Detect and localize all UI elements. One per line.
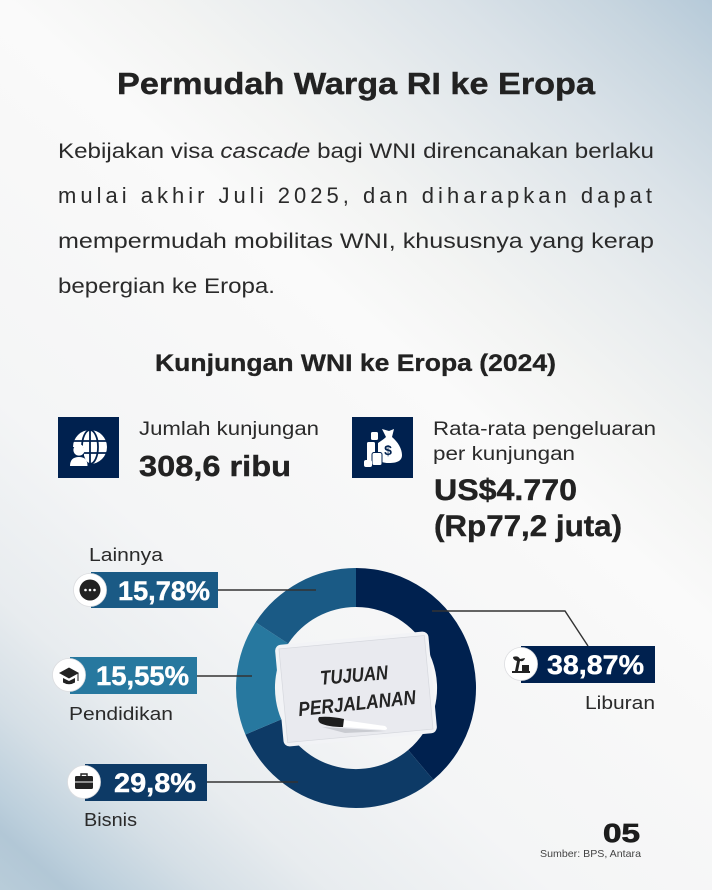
number: total visits: 308,6 ribu — [139, 451, 291, 483]
number: average spending — [434, 474, 622, 543]
callout: Liburan — [504, 646, 655, 713]
text block: intro paragraph: mulai akhir Juli 2025, dan diharapkan dapat — [58, 183, 652, 208]
text block: intro paragraph: mempermudah mobilitas WNI, khususnya yang kerap — [58, 230, 654, 253]
text block: intro paragraph: Kebijakan visa cascade bagi WNI direncanakan berlaku — [58, 140, 654, 163]
value: 38,87%: 38,87% — [547, 650, 644, 680]
callout: Pendidikan — [52, 657, 197, 724]
title: Permudah Warga RI ke Eropa — [117, 66, 596, 101]
icon: briefcase — [68, 766, 100, 798]
heading: visits: Kunjungan WNI ke Eropa (2024) — [155, 350, 556, 377]
label: Lainnya: Lainnya — [89, 545, 164, 565]
label: Bisnis: Bisnis — [84, 810, 137, 830]
segment: Liburan 38,87% — [356, 568, 476, 780]
callout: Bisnis — [68, 764, 207, 830]
icon: marker — [318, 717, 387, 733]
text: Tujuan Perjalanan — [297, 662, 417, 721]
icon: globe and person — [58, 417, 119, 478]
segment: Pendidikan 15,55% — [236, 622, 288, 734]
number: average spending: (Rp77,2 juta) — [434, 510, 622, 543]
text block: intro paragraph — [58, 140, 654, 298]
panel: average spending — [352, 417, 656, 543]
icon: dots — [74, 574, 106, 606]
value: 15,55%: 15,55% — [96, 661, 189, 691]
label: Pendidikan: Pendidikan — [69, 704, 173, 724]
value: 15,78%: 15,78% — [118, 576, 210, 606]
segment: Bisnis 29,8% — [245, 719, 433, 808]
label: total visits: Jumlah kunjungan — [139, 419, 319, 440]
label: average spending: Rata-rata pengeluaran — [433, 419, 656, 440]
icon: money bag and coins — [352, 417, 413, 478]
icon: graduation cap — [52, 658, 86, 692]
text: Tujuan Perjalanan: TUJUAN — [319, 662, 389, 690]
source: Sumber: BPS, Antara — [540, 848, 641, 860]
icon: palm tree and luggage — [504, 648, 538, 680]
donut chart: travel purpose — [236, 568, 476, 808]
whiteboard: center label — [275, 631, 437, 747]
number: average spending: US$4.770 — [434, 474, 577, 507]
value: 29,8%: 29,8% — [114, 768, 196, 798]
label: Liburan: Liburan — [585, 693, 655, 713]
panel: total visits — [58, 417, 319, 483]
callout: Lainnya — [74, 545, 218, 608]
label: average spending: per kunjungan — [433, 444, 575, 465]
text block: intro paragraph: bepergian ke Eropa. — [58, 275, 275, 298]
page number: 05 — [603, 818, 640, 848]
label: average spending — [433, 419, 656, 465]
leader lines — [197, 590, 588, 782]
text: Tujuan Perjalanan: PERJALANAN — [297, 687, 417, 721]
icon: money bag and coins: $ — [384, 442, 392, 458]
segment: Lainnya 15,78% — [256, 568, 356, 644]
